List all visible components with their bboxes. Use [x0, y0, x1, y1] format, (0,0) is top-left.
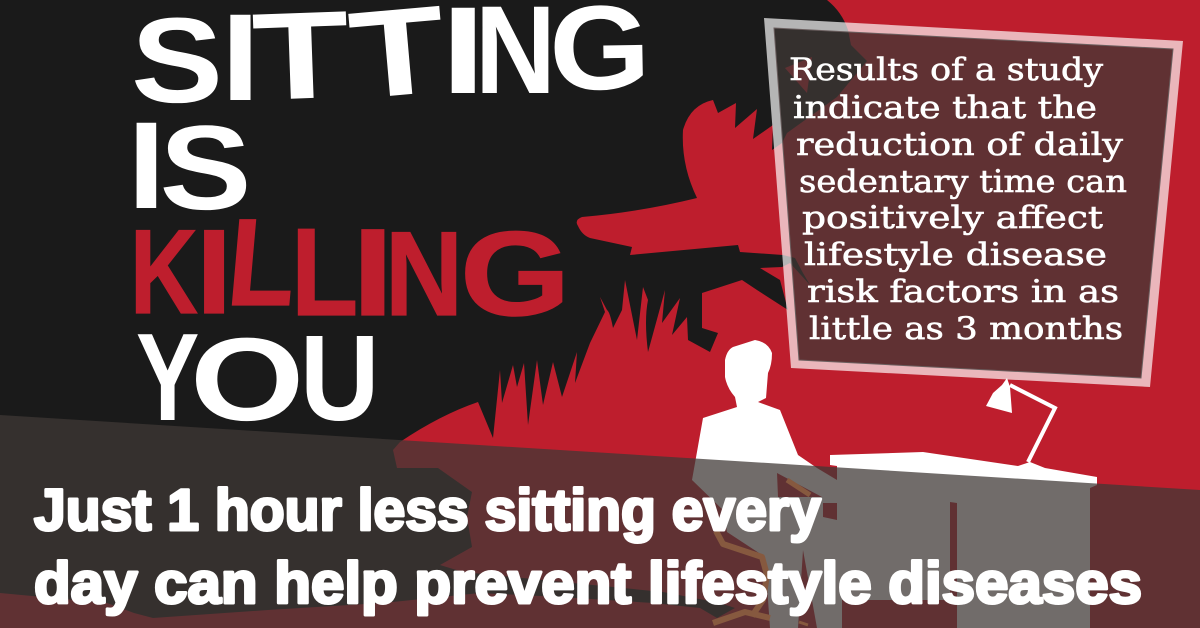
translucent caption band	[0, 415, 1200, 628]
caption text: day can help prevent lifestyle diseases	[34, 551, 1142, 616]
heading line: KILLING: N	[385, 208, 463, 341]
heading: Sitting Is Killing You	[128, 0, 652, 447]
office chair	[713, 480, 810, 625]
callout text: risk factors in as	[807, 274, 1119, 310]
black looming silhouette	[0, 0, 867, 618]
callout text: sedentary time can	[799, 164, 1127, 200]
maroon gaps between arm and torso	[777, 473, 837, 520]
heading line: YOU: U	[300, 310, 379, 446]
callout text	[789, 52, 1127, 347]
callout background	[774, 28, 1173, 378]
heading line: YOU	[136, 309, 379, 447]
caption text: Just 1 hour less sitting every	[34, 478, 821, 543]
callout text: Results of a study	[789, 52, 1104, 88]
heading line: SITTING	[131, 0, 652, 128]
callout text: little as 3 months	[809, 311, 1123, 347]
callout frame	[764, 18, 1183, 387]
callout text: lifestyle disease	[804, 237, 1107, 273]
heading line: KILLING	[130, 193, 570, 342]
heading line: YOU: Y	[136, 309, 199, 447]
person at desk illustration	[692, 340, 1097, 628]
callout text: indicate that the	[793, 90, 1097, 126]
heading line: KILLING: G	[460, 206, 570, 341]
callout text: reduction of daily	[796, 127, 1124, 163]
heading line: KILLING: I	[196, 205, 232, 339]
caption text	[34, 478, 1142, 616]
heading line: KILLING: I	[352, 203, 394, 342]
heading line: IS: I	[128, 96, 165, 235]
callout text: positively affect	[802, 200, 1104, 236]
heading line: IS: S	[160, 101, 252, 235]
callout panel: study results	[764, 18, 1183, 387]
desk lamp	[986, 378, 1055, 462]
heading line: KILLING: L	[223, 193, 302, 331]
heading line: KILLING: K	[130, 204, 198, 339]
desk	[830, 452, 1097, 628]
red triangle in silhouette	[785, 57, 812, 93]
heading line: KILLING: L	[291, 203, 358, 341]
person silhouette	[692, 340, 842, 628]
heading line: YOU: O	[190, 314, 304, 446]
